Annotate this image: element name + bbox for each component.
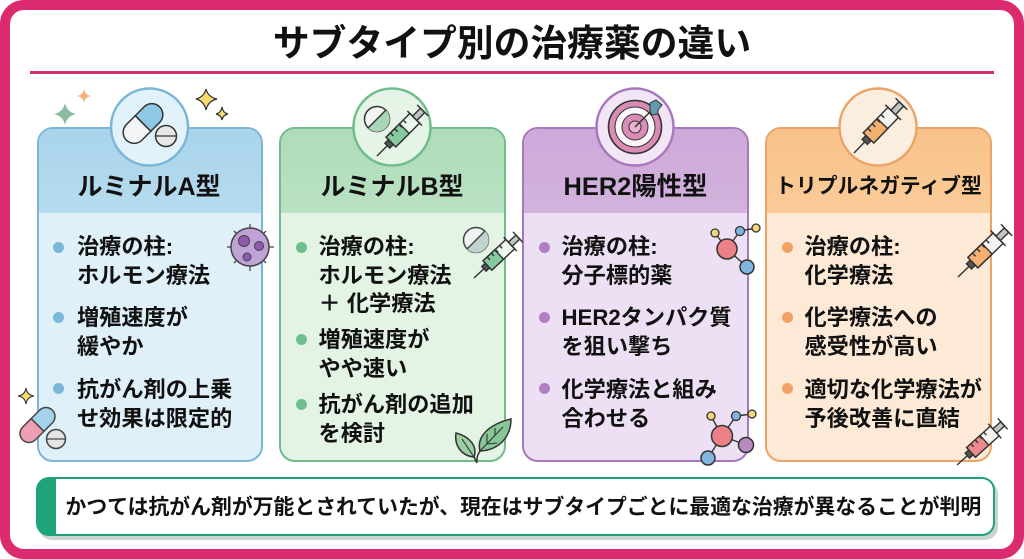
bullet dot (53, 242, 64, 253)
bullet text (562, 305, 732, 358)
bullet text (804, 234, 901, 288)
icon: leaves (456, 419, 511, 463)
icon: sparkles (18, 89, 228, 404)
bullet text: 緩やか (77, 334, 144, 358)
bullet text (77, 305, 188, 358)
list: luminal A (53, 234, 232, 430)
icon: molecule lower (701, 410, 756, 465)
bullet text: 分子標的薬 (562, 262, 672, 288)
list: triple negative (782, 234, 982, 430)
bullet dot (539, 312, 550, 323)
panel: luminal B (279, 126, 506, 462)
title underline (30, 71, 994, 74)
heading: HER2: HER2陽性型 (564, 173, 707, 201)
bullet text: 化学療法 (804, 262, 893, 288)
bullet dot (782, 312, 793, 323)
bullet text: 予後改善に直結 (804, 406, 960, 430)
bullet text (804, 305, 938, 358)
bullet dot (539, 242, 550, 253)
bullet text: 抗がん剤の追加 (318, 392, 474, 417)
bullet text (77, 377, 232, 430)
bullet dot (296, 334, 307, 345)
bullet text: 治療の柱: (77, 234, 173, 259)
icon: side pill and syringe (464, 228, 524, 285)
icon: capsule bottom left (16, 404, 66, 448)
bullet text: HER2タンパク質 (562, 305, 732, 330)
icon circle: pill and syringe (354, 88, 430, 166)
icon: side syringe pink (950, 417, 1009, 472)
bullet text: 抗がん剤の上乗 (77, 377, 232, 402)
header band: luminal A (39, 128, 261, 212)
bullet text (562, 377, 717, 430)
bullet text: を検討 (318, 420, 385, 446)
list: luminal B (296, 234, 474, 446)
heading: triple negative: トリプルネガティブ型 (775, 175, 982, 198)
panel: HER2 positive (522, 126, 749, 462)
bullet text: 合わせる (562, 406, 650, 430)
header band: triple negative (767, 128, 990, 212)
bullet text: ホルモン療法 (318, 262, 452, 288)
bullet text: 治療の柱: (562, 234, 658, 259)
list: HER2 (539, 234, 732, 430)
heading: luminal A: ルミナルA型 (77, 173, 221, 201)
bullet text: 化学療法への (804, 305, 938, 330)
bullet dot (782, 242, 793, 253)
callout text: かつては抗がん剤が万能とされていたが、現在はサブタイプごとに最適な治療が異なることが判明 (66, 496, 981, 519)
icon circle: syringe (840, 88, 916, 166)
icon: molecule upper (711, 224, 760, 274)
bullet text: 増殖速度が (318, 327, 429, 352)
callout bar (36, 477, 995, 536)
bullet text: ＋ 化学療法 (318, 291, 436, 316)
icon circle: target (596, 88, 674, 166)
panel: triple negative (765, 126, 992, 462)
bullet text (562, 234, 672, 288)
bullet text: 増殖速度が (77, 305, 188, 330)
bullet text (77, 234, 210, 288)
bullet dot (539, 383, 550, 394)
bullet text: やや速い (318, 356, 407, 380)
bullet text: せ効果は限定的 (77, 406, 232, 430)
bullet text: 治療の柱: (804, 234, 901, 259)
title: サブタイプ別の治療薬の違い (273, 23, 751, 64)
heading: luminal B: ルミナルB型 (320, 173, 464, 201)
bullet text (318, 392, 474, 446)
bullet text (318, 234, 452, 316)
bullet dot (296, 399, 307, 410)
bullet text: 感受性が高い (804, 334, 938, 358)
header band: luminal B (281, 128, 504, 212)
bullet text (318, 327, 429, 380)
bullet dot (53, 312, 64, 323)
bullet text: を狙い撃ち (562, 334, 672, 358)
bullet text: 治療の柱: (318, 234, 415, 259)
bullet text: 化学療法と組み (562, 377, 717, 402)
icon circle: capsule (111, 88, 188, 166)
bullet dot (53, 383, 64, 394)
bullet dot (296, 242, 307, 253)
icon: virus (227, 224, 274, 271)
bullet text: ホルモン療法 (77, 262, 210, 288)
panel: luminal A (37, 126, 263, 462)
bullet text: 適切な化学療法が (804, 377, 982, 402)
icon: side syringe orange (950, 222, 1014, 285)
bullet dot (782, 383, 793, 394)
header band: HER2 positive (524, 128, 747, 212)
bullet text (804, 377, 982, 430)
